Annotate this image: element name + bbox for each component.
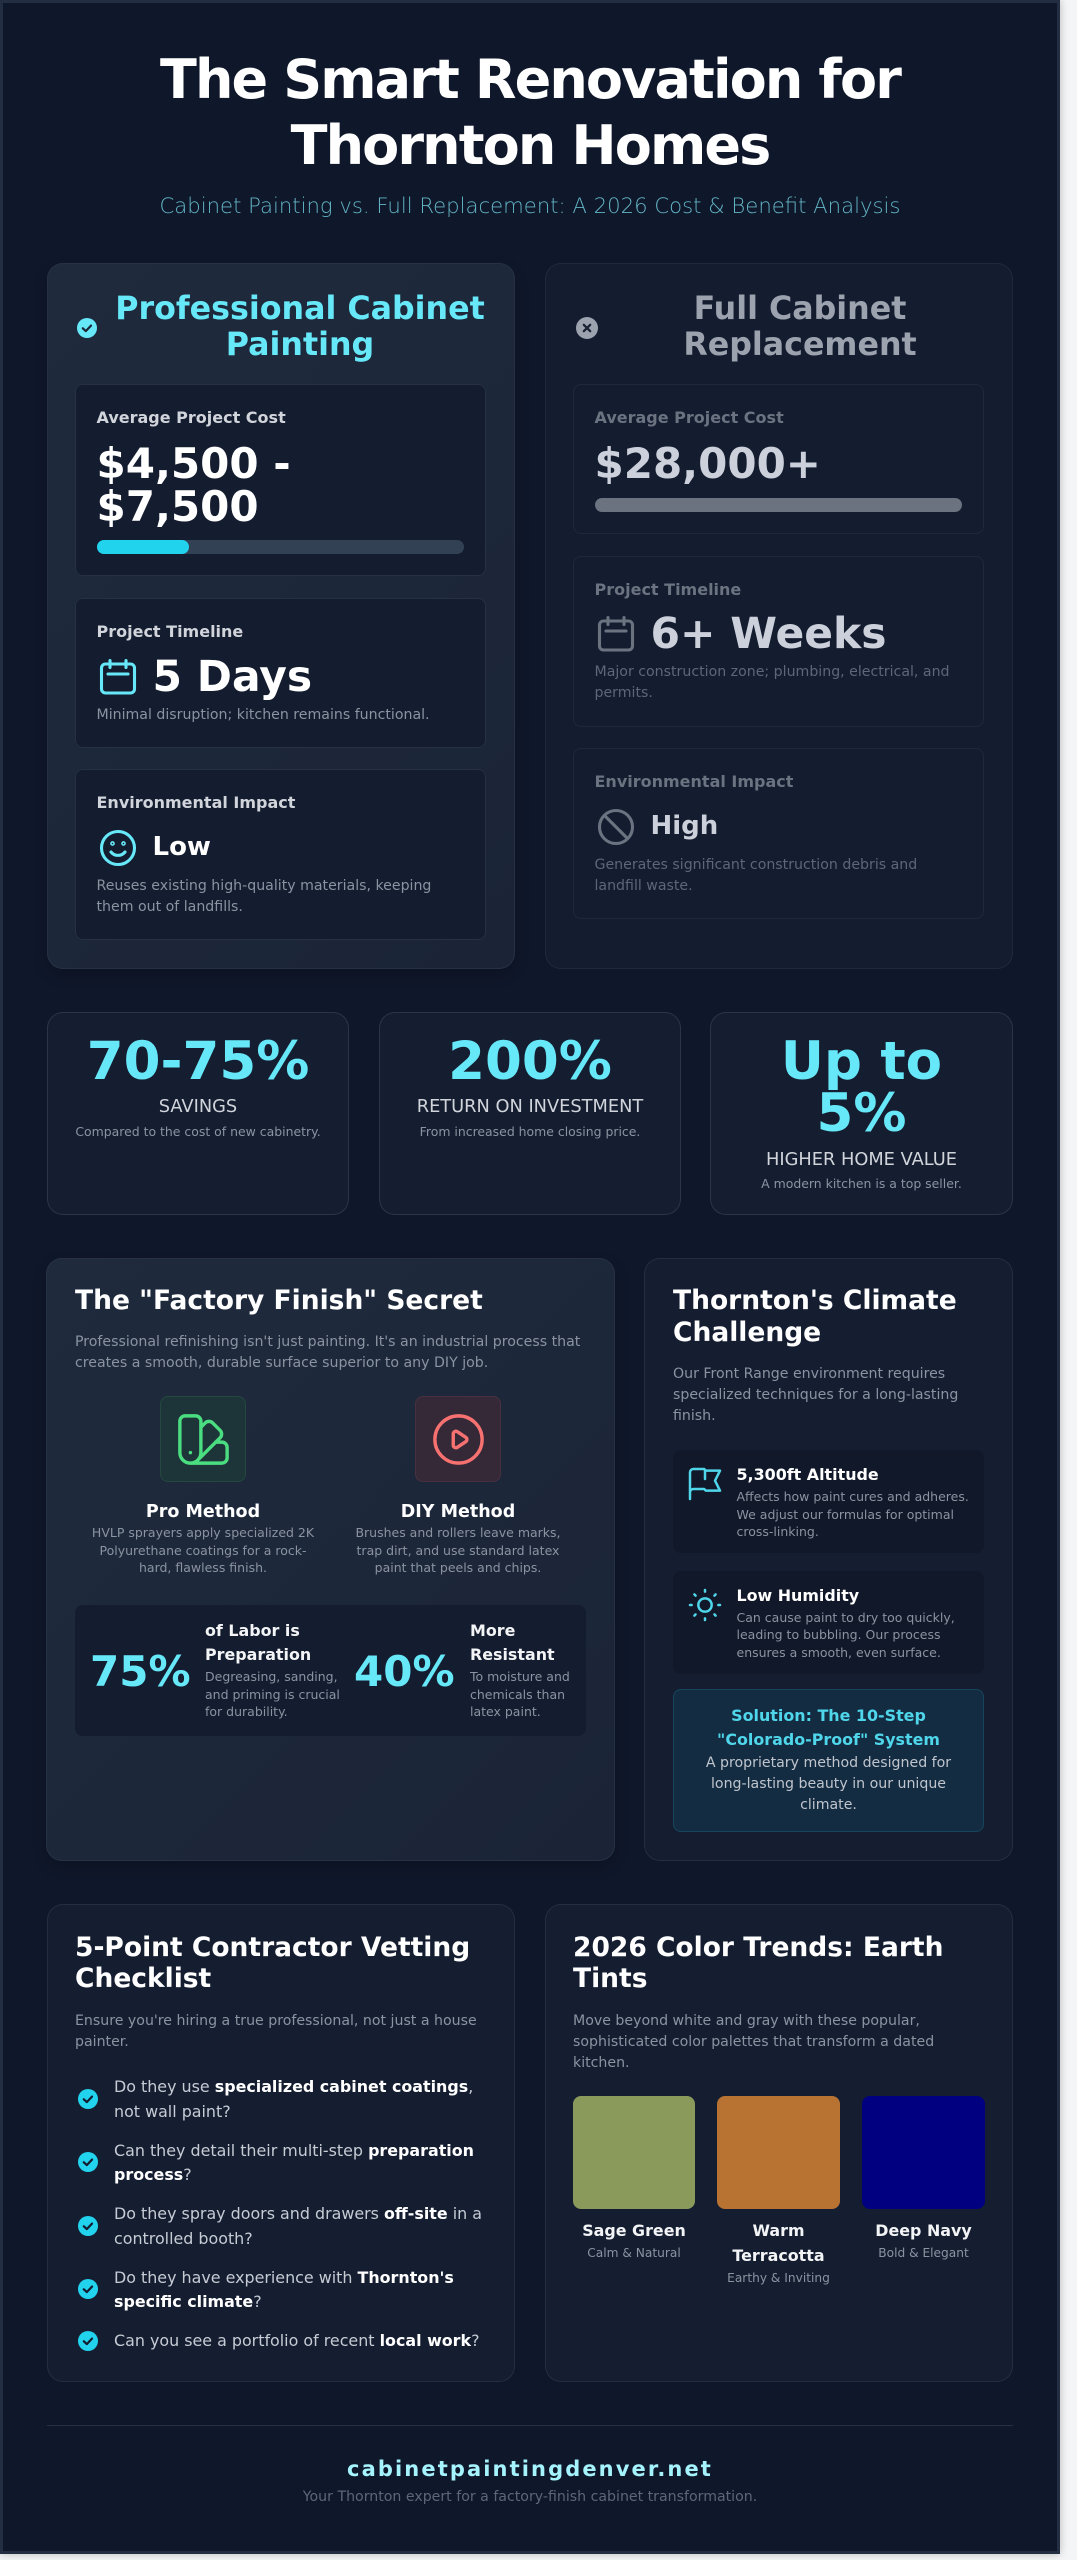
- heading: Thornton's Climate: [673, 1285, 957, 1316]
- stat 75 label: of Labor is: [205, 1621, 300, 1640]
- heading: [573, 1932, 943, 1995]
- solution text: [706, 1755, 952, 1813]
- title: The Smart Renovation for: [160, 48, 900, 111]
- altitude description: We adjust our formulas for optimal: [736, 1507, 954, 1522]
- checklist item 3: Do they spray doors and drawers off-site in a: [114, 2204, 482, 2223]
- intro text: [75, 1334, 580, 1371]
- altitude description: cross-linking.: [736, 1524, 819, 1539]
- pro method title: Pro Method: [146, 1502, 260, 1522]
- stat 75 description: Degreasing, sanding,: [205, 1669, 338, 1684]
- humidity box: [673, 1570, 984, 1674]
- sage green note: Calm & Natural: [587, 2246, 681, 2260]
- stat number: 200%: [448, 1030, 612, 1092]
- stat 40 label: More: [470, 1621, 515, 1640]
- checklist item 3: [114, 2204, 482, 2248]
- diy method description: [355, 1525, 561, 1575]
- intro text: Our Front Range environment requires: [673, 1366, 945, 1382]
- pro method description: hard, flawless finish.: [139, 1560, 267, 1575]
- panel: color trends: [545, 1904, 1013, 2382]
- heading: [115, 291, 485, 363]
- heading: 5-Point Contractor Vetting: [75, 1932, 470, 1963]
- environmental description: Generates significant construction debris and: [594, 856, 917, 872]
- diy method description: Brushes and rollers leave marks,: [355, 1525, 561, 1540]
- environmental description: [594, 856, 917, 894]
- title: [160, 48, 902, 176]
- warm terracotta name: Warm: [752, 2220, 805, 2240]
- intro text: creates a smooth, durable surface superior to any DIY job.: [75, 1355, 488, 1371]
- stat 75 percent: 75%: [90, 1646, 191, 1696]
- timeline description: [594, 664, 950, 701]
- environmental box: [573, 748, 984, 919]
- timeline box: [573, 556, 984, 727]
- altitude description: [736, 1489, 969, 1539]
- stat 75 label: Preparation: [205, 1645, 311, 1664]
- stat 40 description: latex paint.: [470, 1704, 541, 1719]
- intro text: Professional refinishing isn't just painting. It's an industrial process that: [75, 1334, 580, 1350]
- checklist item 2: [114, 2141, 474, 2184]
- intro text: [75, 2012, 477, 2050]
- deep navy name: Deep Navy: [875, 2220, 972, 2240]
- pro method description: [92, 1525, 314, 1575]
- stat card: home value: [710, 1012, 1013, 1215]
- checklist item 2: Can they detail their multi-step preparation: [114, 2141, 474, 2160]
- timeline label: Project Timeline: [594, 580, 741, 598]
- solution callout: [673, 1689, 984, 1832]
- panel: climate challenge: [644, 1258, 1013, 1861]
- cost box: [573, 384, 984, 534]
- timeline label: Project Timeline: [96, 622, 243, 641]
- solution title: [717, 1706, 940, 1749]
- heading: Full Cabinet: [694, 291, 906, 327]
- check icon 2: [78, 2152, 98, 2172]
- icon: ban: [598, 809, 634, 845]
- checklist item 5: Can you see a portfolio of recent local work?: [114, 2331, 480, 2350]
- solution title: Solution: The 10-Step: [731, 1706, 926, 1725]
- environmental box: [75, 769, 486, 940]
- heading: The "Factory Finish" Secret: [75, 1285, 483, 1316]
- altitude title: 5,300ft Altitude: [736, 1465, 879, 1484]
- swatch: deep navy: [862, 2096, 985, 2208]
- icon: x circle: [576, 317, 598, 339]
- pro method description: HVLP sprayers apply specialized 2K: [92, 1525, 314, 1540]
- cost label: Average Project Cost: [594, 408, 784, 427]
- footer website: cabinetpaintingdenver.net: [347, 2456, 713, 2480]
- environmental value: High: [650, 811, 718, 841]
- timeline description: permits.: [594, 685, 653, 701]
- cost bar: [594, 498, 962, 512]
- warm terracotta name: Terracotta: [732, 2246, 825, 2264]
- environmental description: [96, 878, 431, 914]
- timeline description: Major construction zone; plumbing, electrical, and: [594, 664, 950, 680]
- timeline value: 5 Days: [152, 652, 312, 701]
- stat number: 5%: [816, 1082, 906, 1144]
- checklist item 4: Do they have experience with Thornton's: [114, 2268, 454, 2287]
- intro text: sophisticated color palettes that transform a dated: [573, 2034, 934, 2050]
- stat 40 description: [470, 1669, 570, 1719]
- panel: factory finish secret: [46, 1258, 615, 1861]
- stat 75 label: [205, 1621, 311, 1664]
- cost bar: [96, 540, 464, 554]
- stat number: 70-75%: [87, 1030, 309, 1092]
- environmental value: Low: [152, 832, 211, 862]
- solution text: climate.: [800, 1797, 857, 1813]
- checklist item 1: Do they use specialized cabinet coatings,: [114, 2077, 473, 2096]
- warm terracotta note: Earthy & Inviting: [727, 2270, 830, 2284]
- icon: flag: [688, 1468, 722, 1500]
- stat 40 percent: 40%: [354, 1646, 455, 1696]
- swatch: sage green: [573, 2096, 695, 2208]
- check icon 5: [78, 2331, 98, 2351]
- humidity title: Low Humidity: [736, 1586, 859, 1604]
- heading: [673, 1285, 957, 1348]
- heading: [75, 1932, 470, 1994]
- stat label: HIGHER HOME VALUE: [766, 1148, 957, 1170]
- heading: Painting: [226, 327, 374, 363]
- heading: Challenge: [673, 1317, 821, 1348]
- icon: diy method play: [415, 1396, 501, 1482]
- heading: Checklist: [75, 1963, 211, 1994]
- stat note: Compared to the cost of new cabinetry.: [75, 1124, 321, 1138]
- icon: check circle: [77, 318, 97, 338]
- intro text: Ensure you're hiring a true professional, not just a house: [75, 2012, 477, 2028]
- intro text: painter.: [75, 2034, 129, 2050]
- altitude box: [673, 1450, 984, 1553]
- cost value: $7,500: [96, 482, 259, 530]
- sage green name: Sage Green: [582, 2220, 686, 2240]
- environmental description: Reuses existing high-quality materials, keeping: [96, 878, 431, 894]
- stat 40 description: chemicals than: [470, 1687, 565, 1702]
- humidity description: [736, 1610, 955, 1660]
- stat label: SAVINGS: [159, 1096, 237, 1117]
- heading: Replacement: [683, 327, 917, 363]
- cost value: $4,500 -: [96, 438, 291, 488]
- icon: sun: [688, 1588, 722, 1622]
- heading: Tints: [573, 1963, 647, 1994]
- heading: [683, 291, 917, 363]
- deep navy note: Bold & Elegant: [878, 2246, 969, 2260]
- timeline box: [75, 598, 486, 748]
- solution text: A proprietary method designed for: [706, 1755, 951, 1771]
- stat note: From increased home closing price.: [420, 1124, 640, 1138]
- icon: pro method swatch: [160, 1396, 246, 1482]
- diy method description: paint that peels and chips.: [375, 1560, 541, 1575]
- stat label: RETURN ON INVESTMENT: [417, 1096, 643, 1117]
- checklist item 2: process?: [114, 2165, 192, 2184]
- checklist item 4: [114, 2268, 454, 2311]
- stat 40 label: [470, 1621, 555, 1664]
- diy method title: DIY Method: [401, 1502, 515, 1522]
- stat number: Up to: [781, 1030, 942, 1092]
- environmental label: Environmental Impact: [594, 772, 793, 791]
- icon: calendar: [598, 616, 634, 652]
- icon: calendar: [100, 659, 136, 694]
- title: Thornton Homes: [291, 114, 769, 176]
- icon: smiley: [100, 830, 136, 866]
- stat note: A modern kitchen is a top seller.: [761, 1176, 962, 1191]
- heading: 2026 Color Trends: Earth: [573, 1932, 943, 1963]
- cost label: Average Project Cost: [96, 408, 286, 427]
- heading: Professional Cabinet: [115, 291, 485, 327]
- stat card: return on investment: [379, 1012, 681, 1215]
- intro text: specialized techniques for a long-lasting: [673, 1386, 958, 1402]
- checklist item 4: specific climate?: [114, 2292, 262, 2311]
- panel: full cabinet replacement: [545, 263, 1013, 969]
- solution title: "Colorado-Proof" System: [717, 1730, 940, 1749]
- intro text: finish.: [673, 1408, 716, 1424]
- stat number: [781, 1030, 942, 1144]
- checklist item 1: not wall paint?: [114, 2102, 231, 2121]
- intro text: [573, 2010, 934, 2074]
- panel: vetting checklist: [47, 1904, 515, 2382]
- diy method description: trap dirt, and use standard latex: [357, 1543, 559, 1558]
- stats box: [75, 1605, 586, 1736]
- stat 40 description: To moisture and: [470, 1669, 570, 1684]
- cost box: [75, 384, 486, 576]
- subtitle: Cabinet Painting vs. Full Replacement: A 2026 Cost & Benefit Analysis: [160, 193, 900, 218]
- footer tagline: Your Thornton expert for a factory-finish cabinet transformation.: [303, 2489, 757, 2505]
- warm terracotta name: [717, 2218, 840, 2268]
- swatch: warm terracotta: [717, 2096, 840, 2208]
- check icon 3: [78, 2216, 98, 2236]
- altitude description: Affects how paint cures and adheres.: [736, 1489, 969, 1504]
- stat card: savings: [47, 1012, 349, 1215]
- cost value: [96, 438, 291, 530]
- humidity description: leading to bubbling. Our process: [736, 1627, 940, 1642]
- cost bar fill: [96, 540, 188, 554]
- checklist item 1: [114, 2077, 473, 2121]
- stat 75 description: [205, 1669, 340, 1719]
- intro text: [673, 1366, 958, 1424]
- panel: professional cabinet painting: [47, 263, 515, 969]
- stat 75 description: for durability.: [205, 1704, 288, 1719]
- stat 75 description: and priming is crucial: [205, 1687, 340, 1702]
- stat 40 label: Resistant: [470, 1645, 555, 1664]
- check icon 4: [78, 2279, 98, 2299]
- timeline value: 6+ Weeks: [650, 609, 886, 658]
- humidity description: ensures a smooth, even surface.: [736, 1645, 941, 1660]
- environmental description: landfill waste.: [594, 878, 693, 894]
- environmental description: them out of landfills.: [96, 898, 243, 914]
- timeline description: Minimal disruption; kitchen remains functional.: [96, 706, 430, 722]
- environmental label: Environmental Impact: [96, 793, 295, 812]
- pro method description: Polyurethane coatings for a rock-: [100, 1543, 306, 1558]
- intro text: Move beyond white and gray with these popular,: [573, 2012, 920, 2028]
- check icon 1: [78, 2089, 98, 2109]
- humidity description: Can cause paint to dry too quickly,: [736, 1610, 955, 1624]
- solution text: long-lasting beauty in our unique: [711, 1776, 946, 1792]
- checklist item 3: controlled booth?: [114, 2229, 253, 2248]
- intro text: kitchen.: [573, 2054, 630, 2070]
- cost value: $28,000+: [594, 438, 821, 488]
